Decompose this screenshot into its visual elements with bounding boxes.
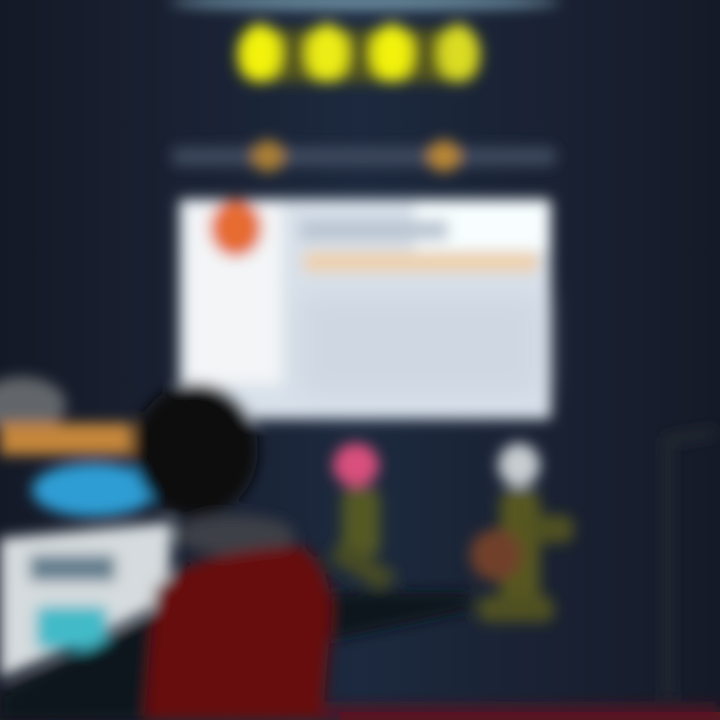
blue capsule <box>32 463 156 517</box>
faint stand at right <box>668 432 716 696</box>
gray dome <box>0 377 66 433</box>
collar <box>175 515 295 555</box>
top glow <box>170 0 560 10</box>
icon: orange circle <box>210 199 262 257</box>
white icon <box>498 443 540 487</box>
bottom edge base <box>340 712 720 720</box>
text block <box>300 295 540 395</box>
left arm <box>0 610 165 720</box>
head <box>134 383 258 517</box>
white panel <box>0 522 172 678</box>
orange line <box>304 252 538 272</box>
main white panel <box>179 199 551 419</box>
panel: left column <box>186 204 282 384</box>
presenter <box>0 383 470 720</box>
yellow lights row <box>236 24 482 82</box>
olive figure right <box>470 488 574 622</box>
red torso <box>145 546 332 720</box>
header strip with orange dots <box>172 140 556 172</box>
orange bar <box>0 423 132 455</box>
olive figure left <box>330 488 398 590</box>
right arm <box>310 592 470 640</box>
heading bar <box>300 220 448 240</box>
bottom red strip <box>320 706 720 720</box>
panel: upper right highlight <box>415 202 549 250</box>
pink icon <box>333 443 379 487</box>
left device <box>0 377 172 678</box>
gray stripe <box>30 555 115 581</box>
cyan block <box>36 606 108 650</box>
